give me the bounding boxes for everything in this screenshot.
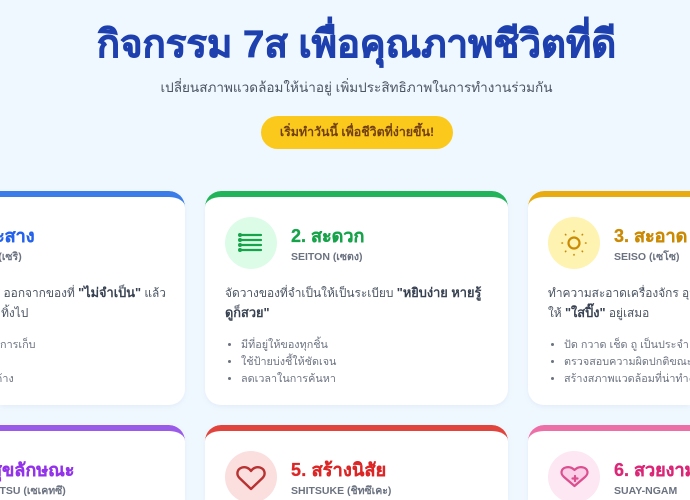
card 1 description — [0, 284, 166, 320]
panel: card 4 seiketsu — [0, 425, 185, 500]
title: กิจกรรม 7ส เพื่อคุณภาพชีวิตที่ดี — [97, 23, 616, 66]
card 2 subheading: SEITON (เซตง) — [291, 251, 362, 263]
card 1 list — [0, 337, 36, 385]
card 2 list: มีที่อยู่ให้ของทุกชิ้น — [241, 339, 328, 351]
card 2 list: ใช้ป้ายบ่งชี้ให้ชัดเจน — [241, 356, 336, 368]
panel: card 6 suay-ngam — [528, 425, 690, 500]
icon: heart — [225, 451, 277, 500]
panel: card 2 seiton — [205, 191, 508, 405]
card 5 subheading: SHITSUKE (ชิทซึเคะ) — [291, 485, 391, 497]
panel: card 3 seiso — [528, 191, 690, 405]
card 5 heading: 5. สร้างนิสัย — [291, 460, 386, 480]
card 3 subheading: SEISO (เซโซ) — [614, 251, 680, 263]
card 2 description — [225, 284, 482, 321]
call to action button — [261, 116, 453, 149]
card 3 description — [548, 284, 690, 320]
card 2 description: ดูก็สวย" — [225, 305, 270, 320]
card 6 subheading: SUAY-NGAM — [614, 485, 677, 497]
card 2 list — [228, 336, 336, 385]
panel: card 5 shitsuke — [205, 425, 508, 500]
icon: sun — [548, 217, 600, 269]
card 3 list: ปัด กวาด เช็ด ถู เป็นประจำ — [564, 339, 689, 351]
card 3 description: ให้ "ใสปิ๊ง" อยู่เสมอ — [548, 305, 649, 320]
card 2 description: จัดวางของที่จำเป็นให้เป็นระเบียบ "หยิบง่าย หายรู้ — [225, 285, 481, 300]
panel: card 1 seiri — [0, 191, 185, 405]
subtitle: เปลี่ยนสภาพแวดล้อมให้น่าอยู่ เพิ่มประสิทธิภาพในการทำงานร่วมกัน — [160, 80, 553, 95]
call to action button: เริ่มทำวันนี้ เพื่อชีวิตที่ง่ายขึ้น! — [280, 125, 434, 139]
card 3 heading: 3. สะอาด — [614, 226, 687, 246]
card 2 list: ลดเวลาในการค้นหา — [241, 373, 336, 385]
card 3 list — [551, 337, 690, 385]
card 2 heading: 2. สะดวก — [291, 226, 364, 246]
icon: list — [225, 217, 277, 269]
icon: heart with plus — [548, 451, 600, 500]
